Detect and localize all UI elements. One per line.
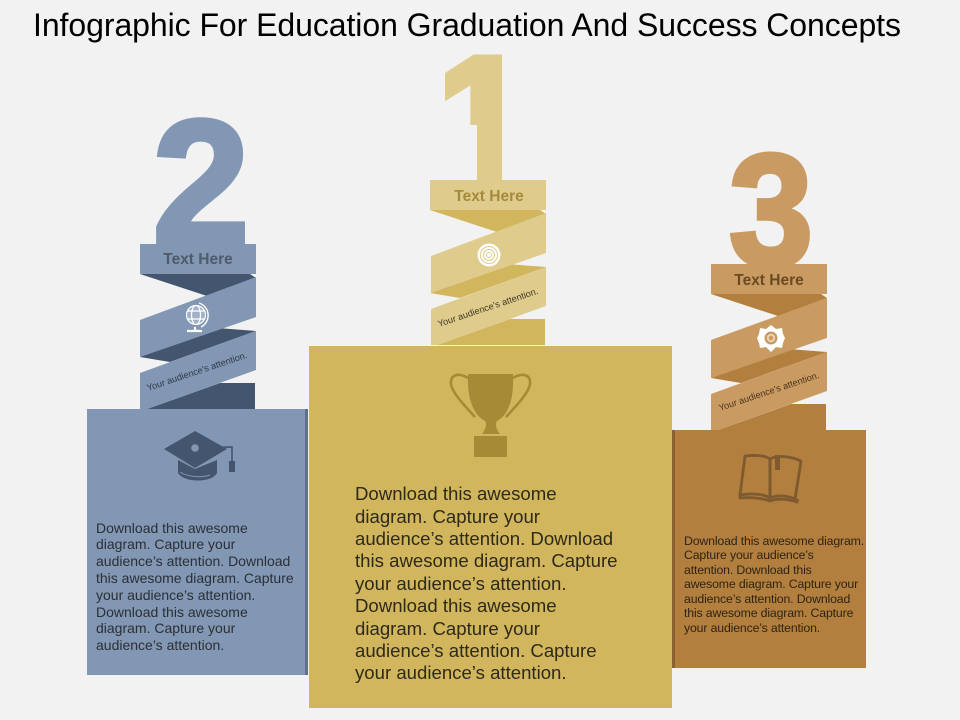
ribbon heading: Text Here — [454, 188, 524, 205]
number 3: 3 — [729, 121, 813, 299]
ribbon caption: Your audience’s attention. — [717, 370, 820, 413]
panel text: Download this awesome — [96, 520, 248, 536]
panel text: audience’s attention. Download — [96, 553, 290, 569]
ribbon: brown — [711, 264, 827, 430]
panel text: attention. Download this — [684, 563, 812, 577]
ribbon: blue — [140, 244, 256, 409]
column 3: brown — [672, 121, 867, 668]
ribbon heading: Text Here — [163, 251, 233, 268]
number 1: 1 — [425, 13, 539, 242]
panel text: this awesome diagram. Capture — [96, 570, 294, 586]
panel text: Download this awesome — [96, 604, 248, 620]
ribbon: gold — [430, 180, 546, 345]
panel text: audience’s attention. — [96, 637, 224, 653]
number 2: 2 — [152, 83, 250, 282]
icon: gear — [757, 325, 785, 352]
icon: target — [478, 244, 500, 266]
panel text: this awesome diagram. Capture — [355, 550, 618, 571]
column 1: gold — [309, 13, 672, 708]
panel text: Capture your audience’s — [684, 548, 814, 562]
ribbon heading: Text Here — [734, 272, 804, 289]
panel text: your audience’s attention. — [684, 621, 820, 635]
ribbon caption: Your audience’s attention. — [436, 286, 539, 329]
panel text: Download this awesome — [355, 595, 557, 616]
panel text: audience’s attention. Capture — [355, 640, 597, 661]
title: Infographic For Education Graduation And Success Concepts — [33, 7, 901, 43]
panel text: diagram. Capture your — [96, 536, 236, 552]
panel: blue — [87, 409, 308, 675]
icon: open book — [740, 455, 801, 502]
panel text: Download this awesome diagram. — [684, 534, 864, 548]
panel text: your audience’s attention. — [96, 587, 255, 603]
panel text: Download this awesome — [355, 483, 557, 504]
panel text: audience’s attention. Download — [684, 592, 850, 606]
panel text: awesome diagram. Capture your — [684, 577, 858, 591]
icon: globe — [186, 303, 208, 331]
panel text: diagram. Capture your — [355, 618, 540, 639]
panel: gold — [309, 346, 672, 708]
panel text: diagram. Capture your — [96, 620, 236, 636]
icon: graduation cap — [164, 431, 235, 480]
panel text: your audience’s attention. — [355, 662, 567, 683]
panel: brown — [672, 430, 866, 668]
panel text: diagram. Capture your — [355, 506, 540, 527]
panel text: your audience’s attention. — [355, 573, 567, 594]
column 2: blue — [87, 83, 308, 675]
ribbon caption: Your audience’s attention. — [145, 350, 248, 393]
icon: trophy — [451, 374, 530, 457]
panel text: this awesome diagram. Capture — [684, 606, 854, 620]
panel text: audience’s attention. Download — [355, 528, 613, 549]
